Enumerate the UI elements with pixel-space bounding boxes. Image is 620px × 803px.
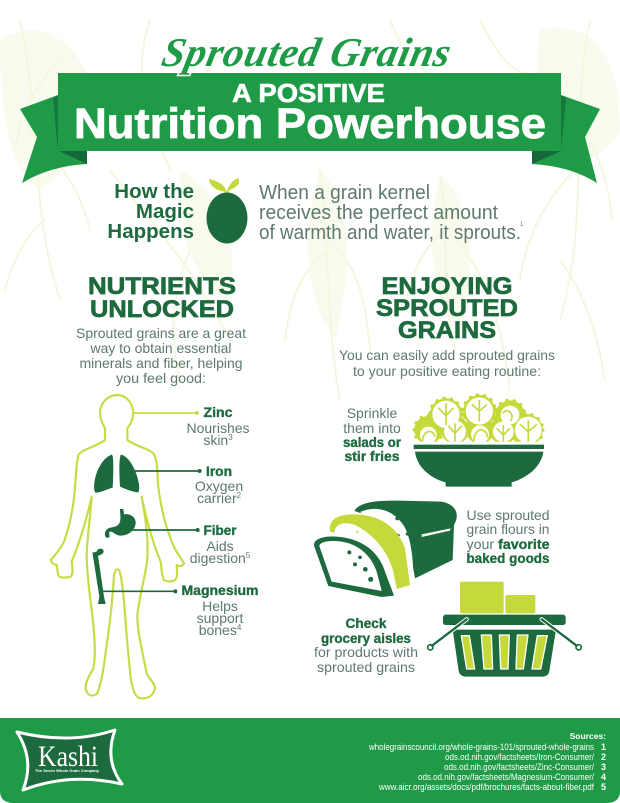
text: when a grain kernel: 1 [520, 222, 524, 228]
kashi logo: Kashi [38, 740, 98, 773]
salad leaves [414, 395, 543, 446]
label: fiber: Fiber [204, 522, 237, 538]
middle slice [330, 514, 410, 589]
body outline [51, 395, 184, 698]
sources: 5 [601, 782, 606, 792]
right ribbon tail [532, 95, 600, 183]
sources: 3 [601, 762, 606, 772]
heading: how the magic happens [107, 180, 194, 243]
heading: enjoying sprouted grains: GRAINS [398, 317, 496, 344]
heading: how the magic happens: Happens [107, 220, 194, 243]
iron pointer [135, 469, 202, 473]
text: check grocery aisles: Check [346, 615, 387, 631]
text: use sprouted grain flours: your favorite [466, 536, 550, 552]
text: when a grain kernel [259, 182, 524, 244]
text: check grocery aisles: grocery aisles [321, 630, 411, 646]
basket rim [443, 615, 566, 625]
sources [368, 731, 606, 792]
heading: enjoying sprouted grains: SPROUTED [376, 295, 518, 322]
label: iron [195, 463, 243, 506]
label: fiber [190, 522, 251, 566]
front slice [314, 537, 394, 597]
text: enjoying intro [339, 347, 555, 379]
heading: enjoying sprouted grains: ENJOYING [382, 273, 512, 300]
heading: nutrients unlocked [88, 273, 236, 323]
banner ribbon [20, 73, 600, 183]
label: iron: 2 [237, 491, 242, 500]
fiber pointer [131, 528, 200, 532]
text: sprinkle: them into [343, 420, 401, 436]
sources: 4 [601, 772, 606, 782]
sources: ods.od.nih.gov/factsheets/Magnesium-Consumer/ [418, 772, 594, 782]
label: fiber: 5 [246, 551, 251, 560]
icon: grocery basket [428, 582, 581, 677]
stomach [105, 509, 136, 538]
sources: ods.od.nih.gov/factsheets/Zinc-Consumer/ [444, 762, 594, 772]
icon: salad bowl [413, 395, 545, 487]
footer [0, 718, 620, 803]
label: zinc: 3 [228, 433, 233, 442]
label: fiber: digestion [190, 550, 246, 566]
heading: how the magic happens: How the [114, 180, 194, 203]
label: fiber: Aids [206, 538, 234, 554]
zinc pointer [133, 411, 199, 415]
label: magnesium: support [197, 610, 243, 626]
femur bone [92, 549, 106, 604]
text: sprinkle: Sprinkle [347, 405, 397, 421]
text: sprinkle [343, 405, 402, 464]
text: use sprouted grain flours: Use sprouted [466, 507, 550, 523]
label: iron: Iron [206, 463, 232, 479]
icon: sprouting kernel [206, 179, 248, 244]
kashi logo: The Seven Whole Grain Company [35, 768, 100, 773]
basket body [453, 630, 556, 677]
bowl rim [414, 445, 544, 449]
banner body [58, 73, 561, 151]
text: use sprouted grain flours [466, 507, 550, 566]
text: when a grain kernel: receives the perfect amount [259, 202, 498, 224]
label: zinc: skin [203, 432, 228, 448]
sources: www.aicr.org/assets/docs/pdf/brochures/facts-about-fiber.pdf [378, 782, 594, 792]
text: when a grain kernel: of warmth and water, it sprouts. [259, 222, 521, 244]
label: magnesium: Magnesium [182, 582, 258, 598]
magnesium pointer [102, 589, 177, 593]
sources: Sources: [570, 731, 606, 741]
label: zinc [186, 404, 250, 448]
icon: bread loaf [314, 501, 457, 597]
lungs [94, 455, 139, 493]
basket contents [460, 582, 535, 613]
sources: 2 [601, 752, 606, 762]
heading: nutrients unlocked: NUTRIENTS [88, 273, 236, 300]
text: nutrients intro: you feel good: [116, 370, 206, 386]
text: nutrients intro: way to obtain essential [90, 340, 232, 356]
heading: how the magic happens: Magic [136, 200, 194, 223]
heading: enjoying sprouted grains [376, 273, 518, 344]
sources: ods.od.nih.gov/factsheets/Iron-Consumer/ [445, 752, 594, 762]
loaf [354, 501, 457, 578]
text: when a grain kernel: When a grain kernel [259, 182, 430, 204]
subtitle: a positive: A POSITIVE [232, 78, 385, 108]
text: check grocery aisles: sprouted grains [317, 659, 415, 675]
label: magnesium: Helps [202, 598, 238, 614]
label: zinc: Zinc [204, 404, 233, 420]
heading: nutrients unlocked: UNLOCKED [90, 296, 234, 323]
text: use sprouted grain flours: baked goods [466, 550, 550, 566]
text: use sprouted grain flours: grain flours in [466, 521, 550, 537]
text: check grocery aisles [314, 615, 418, 675]
sources: wholegrainscouncil.org/whole-grains-101/sprouted-whole-grains [368, 742, 594, 752]
basket handles [428, 619, 581, 650]
text: enjoying intro: You can easily add sprouted grains [339, 347, 555, 363]
text: sprinkle: stir fries [344, 448, 400, 464]
title: sprouted grains: Sprouted Grains [158, 29, 456, 75]
label: zinc: Nourishes [186, 420, 250, 436]
text: nutrients intro: Sprouted grains are a great [76, 325, 246, 341]
label: iron: Oxygen [195, 478, 243, 494]
label: magnesium: 4 [237, 623, 242, 632]
left ribbon tail [20, 95, 87, 183]
label: iron: carrier [197, 490, 237, 506]
kashi logo [17, 730, 122, 790]
sources: 1 [601, 742, 606, 752]
text: nutrients intro [76, 325, 246, 386]
label: magnesium: bones [199, 622, 237, 638]
text: nutrients intro: minerals and fiber, helping [80, 355, 242, 371]
body diagram [51, 395, 202, 698]
text: enjoying intro: to your positive eating routine: [353, 363, 541, 379]
text: sprinkle: salads or [343, 434, 402, 450]
label: magnesium [182, 582, 258, 638]
bowl [415, 452, 543, 487]
text: check grocery aisles: for products with [314, 644, 418, 660]
title: nutrition powerhouse: Nutrition Powerhouse [74, 100, 546, 148]
